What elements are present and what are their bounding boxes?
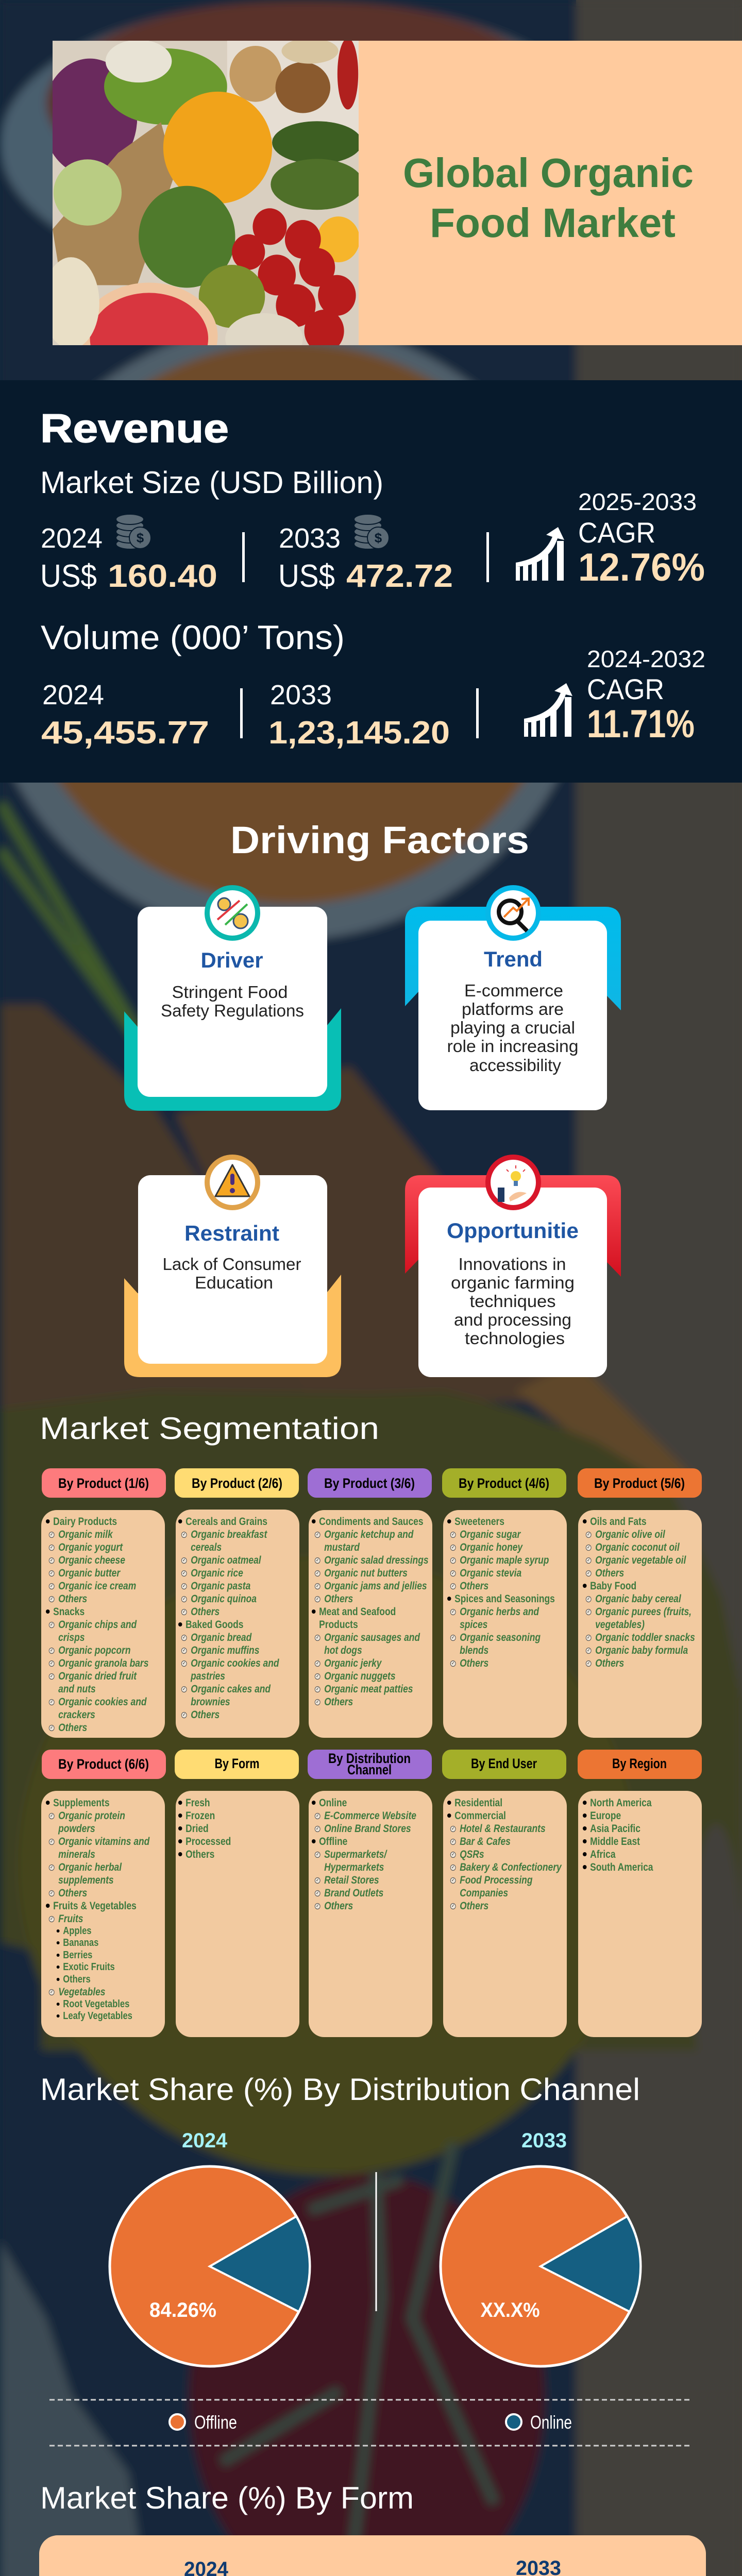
title: Global Organic — [403, 150, 694, 196]
segment: by end user: By End User — [471, 1756, 537, 1771]
segment: by product 4 of 6: By Product (4/6) — [459, 1476, 549, 1491]
segment: by form: Frozen — [185, 1810, 215, 1822]
text: trend: E-commerce — [464, 981, 563, 1000]
text: driver — [161, 948, 304, 1020]
segment: by product 6 of 6: powders — [58, 1823, 95, 1835]
pie chart: 2024: 2024 — [182, 2129, 228, 2152]
segment: by product 6 of 6: Bananas — [63, 1937, 98, 1948]
icon: warning triangle — [205, 1155, 260, 1210]
segment: by product 2 of 6: Organic bread — [191, 1632, 251, 1643]
segment: by form: Fresh — [185, 1797, 210, 1809]
cagr revenue: 12.76% — [578, 546, 705, 589]
card: restraint — [124, 1155, 341, 1377]
segment: by product 1 of 6: and nuts — [58, 1683, 96, 1695]
text: opportunitie: techniques — [470, 1292, 555, 1311]
segment: by product 1 of 6: Organic cookies and — [58, 1696, 147, 1708]
segment: by product 2 of 6: Organic pasta — [191, 1580, 250, 1592]
segment: by product 5 of 6: Others — [595, 1567, 624, 1579]
segment: by distribution channel: Brand Outlets — [324, 1887, 383, 1899]
segment: by form: By Form — [214, 1756, 260, 1771]
segment: by product 2 of 6: Cereals and Grains — [185, 1516, 267, 1528]
segment: by product 2 of 6: Organic oatmeal — [191, 1554, 261, 1566]
segment: by product 3 of 6: hot dogs — [324, 1645, 362, 1656]
segment: by distribution channel: Channel — [347, 1762, 392, 1777]
header panel — [53, 41, 742, 345]
segment: by end user: Others — [460, 1900, 488, 1912]
segment: by product 3 of 6: Condiments and Sauces — [319, 1516, 424, 1528]
segment: by product 1 of 6: Organic yogurt — [58, 1541, 123, 1553]
segment: by region: By Region — [612, 1756, 667, 1771]
segment: by region: South America — [590, 1861, 653, 1873]
segment: by product 5 of 6 — [578, 1468, 702, 1738]
segment: by product 5 of 6: By Product (5/6) — [594, 1476, 685, 1491]
segment: by product 4 of 6: Organic sugar — [460, 1529, 520, 1540]
segment: by product 1 of 6: Snacks — [53, 1606, 85, 1618]
icon: trend magnifier — [485, 885, 541, 941]
text: restraint: Restraint — [184, 1221, 279, 1245]
volume values: 45,455.77 — [41, 715, 209, 751]
segment: by form — [175, 1750, 299, 2037]
icon: hand with light bulb — [485, 1155, 541, 1210]
segment: by distribution channel: By Distribution — [328, 1751, 411, 1766]
cagr volume — [587, 646, 705, 746]
segment: by end user: Bar & Cafes — [460, 1836, 511, 1848]
cagr revenue: CAGR — [578, 516, 655, 549]
segment: by product 6 of 6: minerals — [58, 1849, 95, 1860]
segment: by product 2 of 6: Organic quinoa — [191, 1593, 257, 1605]
segment: by product 5 of 6: Oils and Fats — [590, 1516, 647, 1528]
segment: by product 3 of 6 — [308, 1468, 433, 1738]
card: opportunitie — [405, 1155, 621, 1377]
title panel — [359, 41, 742, 345]
text: trend: Trend — [484, 947, 543, 971]
segment: by product 1 of 6: Others — [58, 1593, 87, 1605]
segment: by product 1 of 6 — [41, 1468, 166, 1738]
text: restraint: Education — [195, 1273, 273, 1292]
segment: by end user: Bakery & Confectionery — [460, 1861, 562, 1873]
cagr revenue — [578, 488, 705, 589]
segment: by product 1 of 6: Organic chips and — [58, 1619, 137, 1631]
segment: by product 3 of 6: Organic jams and jellies — [324, 1580, 427, 1592]
text: driver: Driver — [201, 948, 263, 972]
segment: by product 2 of 6: Others — [191, 1709, 220, 1721]
segment: by region — [578, 1750, 702, 2037]
card: driver — [124, 885, 341, 1111]
segment: by product 1 of 6: Organic milk — [58, 1529, 113, 1540]
segment: by distribution channel: E-Commerce Website — [324, 1810, 416, 1822]
text: opportunitie: Opportunitie — [447, 1218, 579, 1243]
text: trend — [447, 947, 578, 1075]
segment: by region: North America — [590, 1797, 652, 1809]
segment: by distribution channel: Others — [324, 1900, 353, 1912]
segment: by product 3 of 6: Organic ketchup and — [324, 1529, 413, 1540]
segment: by product 3 of 6: Products — [319, 1619, 358, 1631]
heading: driving factors: Driving Factors — [230, 819, 529, 861]
icon: growth arrow volume — [524, 683, 572, 737]
volume values: 1,23,145.20 — [268, 715, 450, 751]
segment: by end user: Companies — [460, 1887, 508, 1899]
market size values: Market Size (USD Billion) — [40, 465, 383, 500]
segment: by product 4 of 6: Others — [460, 1657, 488, 1669]
segment: by form: Processed — [185, 1836, 231, 1848]
segment: by product 3 of 6: Others — [324, 1593, 353, 1605]
segment: by product 2 of 6: cereals — [191, 1541, 222, 1553]
segment: by end user: Residential — [454, 1797, 502, 1809]
segment: by distribution channel: Online Brand Stores — [324, 1823, 411, 1835]
text: restraint — [163, 1221, 301, 1292]
segment: by end user: Food Processing — [460, 1874, 532, 1886]
segment: by product 6 of 6: Fruits — [58, 1913, 83, 1925]
pie chart: 2024 — [110, 2129, 310, 2366]
legend: distribution channel — [49, 2400, 690, 2446]
segment: by product 1 of 6: Organic butter — [58, 1567, 120, 1579]
market size values: 2024 — [41, 523, 103, 554]
heading: market segmentation: Market Segmentation — [40, 1411, 379, 1446]
panel: bar charts by form — [39, 2535, 706, 2576]
text: trend: role in increasing — [447, 1037, 578, 1056]
card: trend — [405, 885, 621, 1110]
segment: by product 1 of 6: Organic ice cream — [58, 1580, 136, 1592]
market size values — [40, 465, 489, 594]
segment: by product 3 of 6: By Product (3/6) — [324, 1476, 415, 1491]
title: Food Market — [430, 200, 676, 246]
segment: by product 6 of 6: Organic herbal — [58, 1861, 122, 1873]
segment: by product 4 of 6: Organic maple syrup — [460, 1554, 549, 1566]
segment: by product 2 of 6: brownies — [191, 1696, 230, 1708]
segment: by product 1 of 6: crisps — [58, 1632, 85, 1643]
segment: by product 5 of 6: Baby Food — [590, 1580, 636, 1592]
segment: by product 6 of 6: Supplements — [53, 1797, 110, 1809]
segment: by product 5 of 6: Others — [595, 1657, 624, 1669]
segment: by region: Asia Pacific — [590, 1823, 640, 1835]
segment: by form: Others — [185, 1849, 214, 1860]
divider between pies — [375, 2172, 377, 2311]
text: driver: Safety Regulations — [161, 1001, 304, 1020]
segment: by region: Europe — [590, 1810, 621, 1822]
header photo of vegetables — [53, 41, 359, 345]
segment: by product 2 of 6: Baked Goods — [185, 1619, 243, 1631]
segment: by product 5 of 6: Organic vegetable oil — [595, 1554, 686, 1566]
segment: by product 6 of 6: Leafy Vegetables — [63, 2010, 132, 2022]
segment: by product 4 of 6: spices — [460, 1619, 487, 1631]
segment: by product 6 of 6: Apples — [63, 1925, 92, 1937]
segment: by product 6 of 6 — [41, 1750, 166, 2037]
segment: by product 3 of 6: Meat and Seafood — [319, 1606, 396, 1618]
segment: by distribution channel: Online — [319, 1797, 347, 1809]
segment: by product 1 of 6: Organic granola bars — [58, 1657, 148, 1669]
segment: by product 6 of 6: Exotic Fruits — [63, 1961, 115, 1973]
segment: by product 1 of 6: Dairy Products — [53, 1516, 117, 1528]
segment: by product 2 of 6: pastries — [191, 1670, 225, 1682]
segment: by distribution channel: Offline — [319, 1836, 347, 1848]
segment: by product 1 of 6: Organic cheese — [58, 1554, 125, 1566]
market size values: 160.40 — [108, 558, 217, 594]
segment: by product 6 of 6: Root Vegetables — [63, 1998, 129, 2010]
segment: by product 3 of 6: Organic nut butters — [324, 1567, 408, 1579]
segment: by product 6 of 6: Others — [58, 1887, 87, 1899]
segment: by product 5 of 6: Organic toddler snacks — [595, 1632, 695, 1643]
heading: revenue: Revenue — [40, 405, 229, 451]
segment: by product 2 of 6: Organic muffins — [191, 1645, 259, 1656]
volume values: 2024 — [42, 680, 104, 710]
cagr volume: 2024-2032 — [587, 646, 705, 672]
segment: by product 3 of 6: Organic jerky — [324, 1657, 381, 1669]
text: opportunitie — [447, 1218, 579, 1348]
segment: by product 6 of 6: Organic vitamins and — [58, 1836, 149, 1848]
segment: by product 2 of 6: Others — [191, 1606, 220, 1618]
heading: market share by form: Market Share (%) By Form — [40, 2481, 414, 2515]
text: restraint: Lack of Consumer — [163, 1255, 301, 1274]
segment: by product 6 of 6: Fruits & Vegetables — [53, 1900, 137, 1912]
icon: growth arrow — [516, 527, 564, 581]
segment: by product 2 of 6 — [175, 1468, 299, 1738]
legend: distribution channel: Online — [530, 2412, 572, 2433]
icon: driver gears and arrows — [205, 885, 260, 941]
cagr volume: CAGR — [587, 673, 664, 705]
segment: by product 6 of 6: Others — [63, 1974, 91, 1985]
segment: by distribution channel: Hypermarkets — [324, 1861, 384, 1873]
segment: by product 5 of 6: Organic purees (fruits, — [595, 1606, 692, 1618]
segment: by product 2 of 6: Organic rice — [191, 1567, 243, 1579]
segment: by product 1 of 6: crackers — [58, 1709, 95, 1721]
text: trend: playing a crucial — [450, 1018, 575, 1037]
volume values: Volume (000’ Tons) — [41, 618, 345, 656]
segment: by product 2 of 6: Organic cakes and — [191, 1683, 271, 1695]
segment: by product 6 of 6: Organic protein — [58, 1810, 125, 1822]
heading: market share by distribution channel: Market Share (%) By Distribution Channel — [40, 2072, 640, 2107]
segment: by distribution channel: Retail Stores — [324, 1874, 379, 1886]
segment: by product 2 of 6: Organic breakfast — [191, 1529, 267, 1540]
pie chart: 2024: 84.26% — [149, 2299, 216, 2321]
segment: by region: Africa — [590, 1849, 616, 1860]
segment: by product 4 of 6: Others — [460, 1580, 488, 1592]
cagr revenue: 2025-2033 — [578, 488, 697, 515]
icon: coins 2033: $ — [375, 530, 382, 546]
market size values: US$ — [278, 558, 335, 594]
segment: by product 5 of 6: Organic olive oil — [595, 1529, 665, 1540]
text: opportunitie: organic farming — [451, 1273, 575, 1292]
legend: distribution channel: Offline — [194, 2412, 237, 2433]
text: opportunitie: technologies — [465, 1329, 565, 1348]
title — [403, 150, 694, 246]
segment: by product 4 of 6: Organic honey — [460, 1541, 522, 1553]
segment: by product 5 of 6: Organic coconut oil — [595, 1541, 680, 1553]
volume values — [41, 618, 479, 751]
segment: by product 4 of 6: Sweeteners — [454, 1516, 504, 1528]
pie chart: 2033: 2033 — [521, 2129, 567, 2152]
segment: by product 6 of 6: Vegetables — [58, 1986, 105, 1998]
segment: by end user: Hotel & Restaurants — [460, 1823, 546, 1835]
segment: by product 4 of 6: Organic stevia — [460, 1567, 521, 1579]
segment: by form: Dried — [185, 1823, 209, 1835]
segment: by end user: QSRs — [460, 1849, 484, 1860]
segment: by end user — [442, 1750, 567, 2037]
panel: revenue — [0, 380, 742, 783]
market size values: 2033 — [279, 523, 341, 554]
segment: by product 1 of 6: Organic dried fruit — [58, 1670, 137, 1682]
segment: by product 1 of 6: Organic popcorn — [58, 1645, 130, 1656]
segment: by product 3 of 6: mustard — [324, 1541, 360, 1553]
segment: by product 3 of 6: Organic meat patties — [324, 1683, 413, 1695]
text: trend: platforms are — [462, 999, 564, 1019]
icon: coins 2024 — [116, 514, 151, 549]
segment: by product 3 of 6: Organic salad dressings — [324, 1554, 429, 1566]
segment: by product 4 of 6: Organic seasoning — [460, 1632, 541, 1643]
segment: by distribution channel: Supermarkets/ — [324, 1849, 386, 1860]
segment: by product 6 of 6: By Product (6/6) — [58, 1756, 149, 1772]
segment: by product 1 of 6: By Product (1/6) — [58, 1476, 149, 1491]
icon: coins 2033 — [354, 514, 389, 549]
segment: by product 5 of 6: Organic baby formula — [595, 1645, 688, 1656]
pie chart: 2033: XX.X% — [480, 2299, 540, 2321]
segment: by distribution channel — [308, 1750, 433, 2037]
segment: by product 5 of 6: Organic baby cereal — [595, 1593, 681, 1605]
text: trend: accessibility — [469, 1056, 561, 1075]
segment: by product 3 of 6: Others — [324, 1696, 353, 1708]
segment: by end user: Commercial — [454, 1810, 506, 1822]
icon: coins 2024: $ — [137, 530, 144, 546]
cagr volume: 11.71% — [587, 702, 695, 746]
segment: by product 3 of 6: Organic nuggets — [324, 1670, 396, 1682]
segment: by product 3 of 6: Organic sausages and — [324, 1632, 420, 1643]
market size values: US$ — [40, 558, 97, 594]
segment: by product 4 of 6: Spices and Seasonings — [454, 1593, 555, 1605]
segment: by region: Middle East — [590, 1836, 640, 1848]
text: driver: Stringent Food — [172, 982, 288, 1002]
segment: by product 4 of 6 — [442, 1468, 567, 1738]
market size values: 472.72 — [346, 558, 453, 594]
segment: by product 4 of 6: Organic herbs and — [460, 1606, 539, 1618]
segment: by product 4 of 6: blends — [460, 1645, 488, 1656]
segment: by product 6 of 6: supplements — [58, 1874, 114, 1886]
segment: by product 1 of 6: Others — [58, 1722, 87, 1734]
segment: by product 2 of 6: Organic cookies and — [191, 1657, 279, 1669]
text: opportunitie: and processing — [454, 1310, 571, 1329]
text: opportunitie: Innovations in — [459, 1255, 566, 1274]
segment: by product 5 of 6: vegetables) — [595, 1619, 645, 1631]
volume values: 2033 — [270, 680, 332, 710]
segment: by product 6 of 6: Berries — [63, 1950, 92, 1961]
segment: by product 2 of 6: By Product (2/6) — [192, 1476, 282, 1491]
pie chart: 2033 — [441, 2129, 640, 2366]
